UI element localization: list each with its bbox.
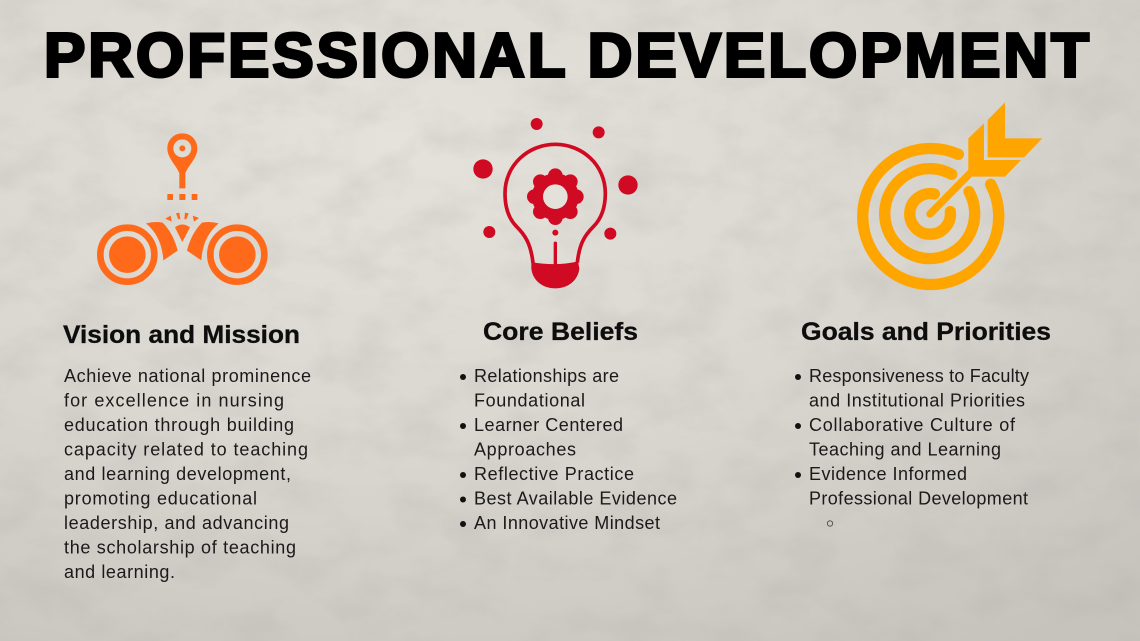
- list: goals and priorities: Responsiveness to Faculty: [809, 366, 1029, 386]
- list: core beliefs: An Innovative Mindset: [474, 513, 660, 533]
- text block: vision and mission statement: the scholarship of teaching: [64, 538, 296, 558]
- text block: vision and mission statement: [64, 366, 311, 582]
- icon: binoculars with location pin: [100, 133, 264, 282]
- list: core beliefs: Foundational: [474, 390, 585, 410]
- list: core beliefs: [460, 366, 677, 533]
- text block: vision and mission statement: promoting educational: [64, 488, 257, 508]
- list: goals and priorities: and Institutional Priorities: [809, 390, 1025, 410]
- list: core beliefs: Relationships are: [474, 366, 619, 386]
- heading: Vision and Mission: Vision and Mission: [63, 321, 300, 349]
- text block: vision and mission statement: capacity related to teaching: [64, 440, 308, 460]
- list: goals and priorities: Professional Development: [809, 488, 1028, 508]
- text block: vision and mission statement: leadership, and advancing: [64, 513, 289, 533]
- text block: vision and mission statement: and learning development,: [64, 464, 291, 484]
- text block: vision and mission statement: Achieve national prominence: [64, 366, 311, 386]
- text block: vision and mission statement: for excellence in nursing: [64, 390, 284, 410]
- heading: Goals and Priorities: Goals and Priorities: [801, 318, 1051, 346]
- list: goals and priorities: Evidence Informed: [809, 464, 967, 484]
- list: goals and priorities: Teaching and Learning: [809, 440, 1001, 460]
- heading: Core Beliefs: Core Beliefs: [483, 318, 638, 346]
- icon: target with arrow: [863, 102, 1042, 284]
- list: core beliefs: Best Available Evidence: [474, 488, 677, 508]
- list: goals and priorities: Collaborative Culture of: [809, 415, 1016, 435]
- list: core beliefs: Reflective Practice: [474, 464, 634, 484]
- list: core beliefs: Learner Centered: [474, 415, 623, 435]
- text block: vision and mission statement: and learning.: [64, 562, 175, 582]
- text block: vision and mission statement: education through building: [64, 415, 294, 435]
- icon: light bulb with gear: [473, 118, 638, 288]
- title: PROFESSIONAL DEVELOPMENT: [44, 22, 1089, 90]
- list: core beliefs: Approaches: [474, 440, 576, 460]
- list: goals and priorities: [795, 366, 1029, 526]
